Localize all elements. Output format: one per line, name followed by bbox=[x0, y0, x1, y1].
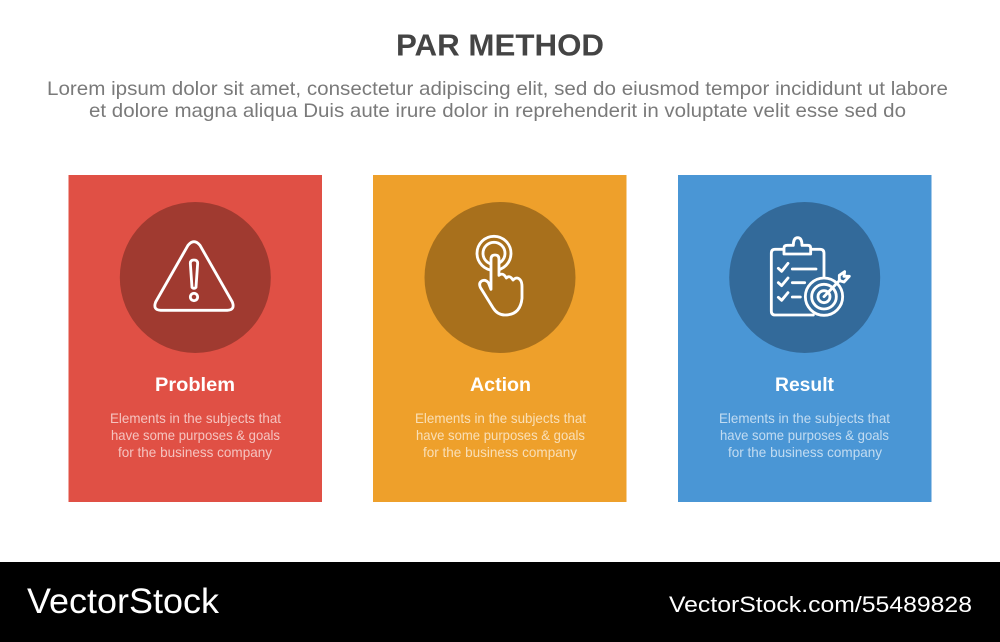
text: problem description bbox=[110, 410, 281, 460]
heading: action: Action bbox=[470, 375, 531, 396]
text: action description: for the business company bbox=[423, 444, 577, 460]
text: result description: have some purposes & goals bbox=[720, 427, 889, 443]
footer image id: VectorStock.com/55489828 bbox=[669, 592, 972, 617]
icon: clipboard with target in circle bbox=[729, 202, 880, 353]
text: problem description: have some purposes & goals bbox=[111, 427, 280, 443]
text: result description: for the business company bbox=[728, 444, 882, 460]
text: action description bbox=[415, 410, 586, 460]
panel: result bbox=[678, 175, 932, 502]
text: action description: have some purposes & goals bbox=[416, 427, 585, 443]
footer bar bbox=[0, 562, 1000, 642]
heading: problem: Problem bbox=[155, 375, 235, 396]
intro text block: Lorem ipsum dolor sit amet, consectetur adipiscing elit, sed do eiusmod tempor incididunt ut labore bbox=[47, 78, 948, 100]
icon: warning triangle in circle bbox=[120, 202, 271, 353]
icon: tapping hand in circle bbox=[424, 202, 576, 353]
text: problem description: for the business company bbox=[118, 444, 272, 460]
intro text block bbox=[47, 78, 948, 122]
panel: action bbox=[373, 175, 626, 502]
text: result description: Elements in the subjects that bbox=[719, 410, 890, 426]
intro text block: et dolore magna aliqua Duis aute irure dolor in reprehenderit in voluptate velit esse sed do bbox=[89, 100, 906, 122]
text: problem description: Elements in the subjects that bbox=[110, 410, 281, 426]
title: PAR METHOD bbox=[396, 28, 604, 62]
footer logo text: VectorStock bbox=[27, 582, 220, 621]
heading: result: Result bbox=[775, 375, 835, 396]
text: result description bbox=[719, 410, 890, 460]
panel: problem bbox=[68, 175, 322, 502]
text: action description: Elements in the subjects that bbox=[415, 410, 586, 426]
